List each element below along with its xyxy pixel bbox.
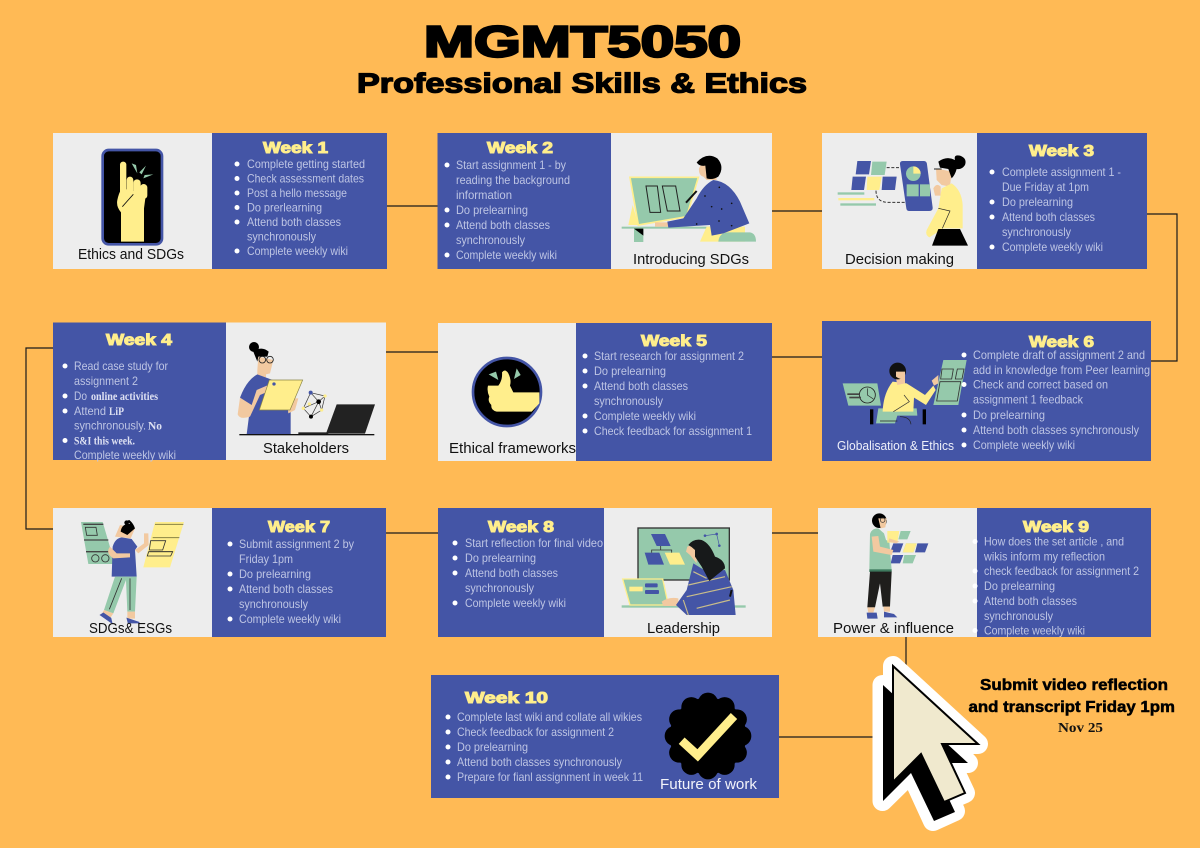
task list: week 5: Check feedback for assignment 1 [594,424,752,438]
task list: week 6: Complete weekly wiki [973,438,1075,452]
task list: week 3: Due Friday at 1pm [1002,180,1089,194]
panel: week 6 [822,321,1151,461]
callout: submit video reflection: and transcript Friday 1pm [968,699,1175,716]
connector lines between weeks [26,206,1177,737]
label: Future of work: Future of work [660,776,757,793]
title: MGMT5050 [424,18,741,66]
heading: Week 7: Week 7 [268,519,330,536]
icon: large cursor arrow [882,666,978,821]
task list: week 3: Attend both classes [1002,210,1095,224]
task list: week 8: Attend both classes [465,566,558,580]
task list: week 10 [446,710,643,784]
panel: week 7 [53,508,386,637]
task list: week 2 [444,158,570,262]
task list: week 4: Do [74,389,87,403]
task list: week 7: synchronously [239,597,308,611]
panel: week 8 [438,508,772,637]
task list: week 2: Attend both classes [456,218,550,232]
task list: week 9: Attend both classes [984,594,1077,608]
panel: week 1 [53,133,387,269]
task list: week 3: synchronously [1002,225,1071,239]
task list: week 2: Start assignment 1 - by [456,158,566,172]
task list: week 8: Complete weekly wiki [465,596,566,610]
callout: submit video reflection: Nov 25 [1058,721,1103,736]
subtitle: Professional Skills & Ethics [357,68,807,98]
task list: week 7: Complete weekly wiki [239,612,341,626]
heading: Week 3: Week 3 [1029,143,1094,160]
task list: week 7: Friday 1pm [239,552,293,566]
task list: week 1: synchronously [247,230,316,244]
task list: week 1: Attend both classes [247,215,341,229]
task list: week 4: online activities [91,391,158,403]
task list: week 9: Complete weekly wiki [984,624,1085,638]
task list: week 10: Prepare for fianl assignment in week 11 [457,770,643,784]
task list: week 5: synchronously [594,394,663,408]
heading: Week 8: Week 8 [488,519,554,536]
task list: week 9: Do prelearning [984,579,1055,593]
task list: week 10: Check feedback for assignment 2 [457,725,614,739]
task list: week 7: Attend both classes [239,582,333,596]
task list: week 6: assignment 1 feedback [973,392,1084,406]
heading: Week 10: Week 10 [465,690,548,707]
task list: week 2: Complete weekly wiki [456,248,557,262]
heading: Week 2: Week 2 [487,140,553,157]
task list: week 7 [228,537,354,626]
task list: week 5: Do prelearning [594,364,666,378]
task list: week 6 [962,348,1150,452]
panel: week 5 [438,323,772,461]
task list: week 2: information [456,188,512,202]
label: Stakeholders: Stakeholders [263,440,349,457]
panel: week 10 [431,675,779,798]
task list: week 9 [972,534,1139,638]
illustration: person at screens [843,360,967,424]
label: Leadership: Leadership [647,620,720,637]
task list: week 9: How does the set article , and [984,534,1124,548]
heading: Week 4: Week 4 [106,332,172,349]
illustration: woman with dashboard [838,155,968,246]
task list: week 3: Complete weekly wiki [1002,240,1103,254]
icon: check badge [665,693,751,779]
panel: week 4 [53,322,386,462]
task list: week 8 [452,536,603,610]
task list: week 3: Do prelearning [1002,195,1073,209]
illustration: person with blocks [867,513,928,619]
task list: week 4: No [148,420,162,432]
task list: week 6: Check and correct based on [973,378,1108,392]
task list: week 1 [234,157,365,258]
task list: week 3 [990,165,1121,254]
callout: submit video reflection: Submit video reflection [980,677,1168,694]
label: Introducing SDGs: Introducing SDGs [633,251,749,268]
task list: week 2: reading the background [456,173,570,187]
callout: submit video reflection [968,677,1175,736]
task list: week 4: LiP [109,406,124,418]
task list: week 4: assignment 2 [74,374,138,388]
task list: week 6: Complete draft of assignment 2 and [973,348,1145,362]
task list: week 10: Complete last wiki and collate all wikies [457,710,642,724]
task list: week 5: Complete weekly wiki [594,409,696,423]
heading: Week 6: Week 6 [1029,334,1094,351]
illustration: person with cards [81,520,184,623]
panel: week 3 [822,133,1147,269]
label: Globalisation & Ethics: Globalisation & Ethics [837,438,954,453]
task list: week 9: check feedback for assignment 2 [984,564,1139,578]
task list: week 2: Do prelearning [456,203,528,217]
task list: week 9: wikis inform my reflection [983,550,1105,564]
label: SDGs& ESGs: SDGs& ESGs [89,620,172,637]
task list: week 8: Start reflection for final video [465,536,603,550]
illustration: woman drawing on tablet [622,156,756,242]
task list: week 6: add in knowledge from Peer learning [973,363,1150,377]
task list: week 4: S&I this week. [74,436,135,448]
task list: week 4: Read case study for [74,359,168,373]
label: Power & influence: Power & influence [833,620,954,637]
task list: week 4: Attend [74,404,106,418]
task list: week 3: Complete assignment 1 - [1002,165,1121,179]
heading: Week 9: Week 9 [1023,519,1089,536]
task list: week 1: Do prerlearning [247,200,322,214]
panel: week 9 [818,508,1151,638]
label: Ethical frameworks: Ethical frameworks [449,440,576,457]
icon: thumbs up [473,358,541,426]
task list: week 1: Check assessment dates [247,172,364,186]
task list: week 10: Attend both classes synchronously [457,755,622,769]
task list: week 9: synchronously [984,609,1053,623]
task list: week 1: Complete weekly wiki [247,244,348,258]
label: Ethics and SDGs: Ethics and SDGs [78,246,184,263]
task list: week 7: Do prelearning [239,567,311,581]
task list: week 10: Do prelearning [457,740,528,754]
task list: week 2: synchronously [456,233,525,247]
task list: week 4: Complete weekly wiki [74,448,176,462]
heading: Week 1: Week 1 [263,140,328,157]
task list: week 6: Attend both classes synchronously [973,423,1139,437]
task list: week 8: Do prelearning [465,551,536,565]
task list: week 5: Attend both classes [594,379,688,393]
panel: week 2 [438,133,772,269]
task list: week 4: synchronously. [74,418,146,432]
task list: week 4 [62,359,176,462]
task list: week 1: Complete getting started [247,157,365,171]
task list: week 5 [582,349,752,438]
illustration: woman at board and laptop [622,528,746,615]
illustration: woman with tablet and laptop [238,342,375,435]
task list: week 1: Post a hello message [247,186,347,200]
task list: week 5: Start research for assignment 2 [594,349,744,363]
task list: week 6: Do prelearning [973,408,1045,422]
heading: Week 5: Week 5 [641,333,707,350]
label: Decision making: Decision making [845,251,954,268]
task list: week 7: Submit assignment 2 by [239,537,354,551]
task list: week 8: synchronously [465,581,534,595]
icon: raised finger hand [103,150,162,244]
